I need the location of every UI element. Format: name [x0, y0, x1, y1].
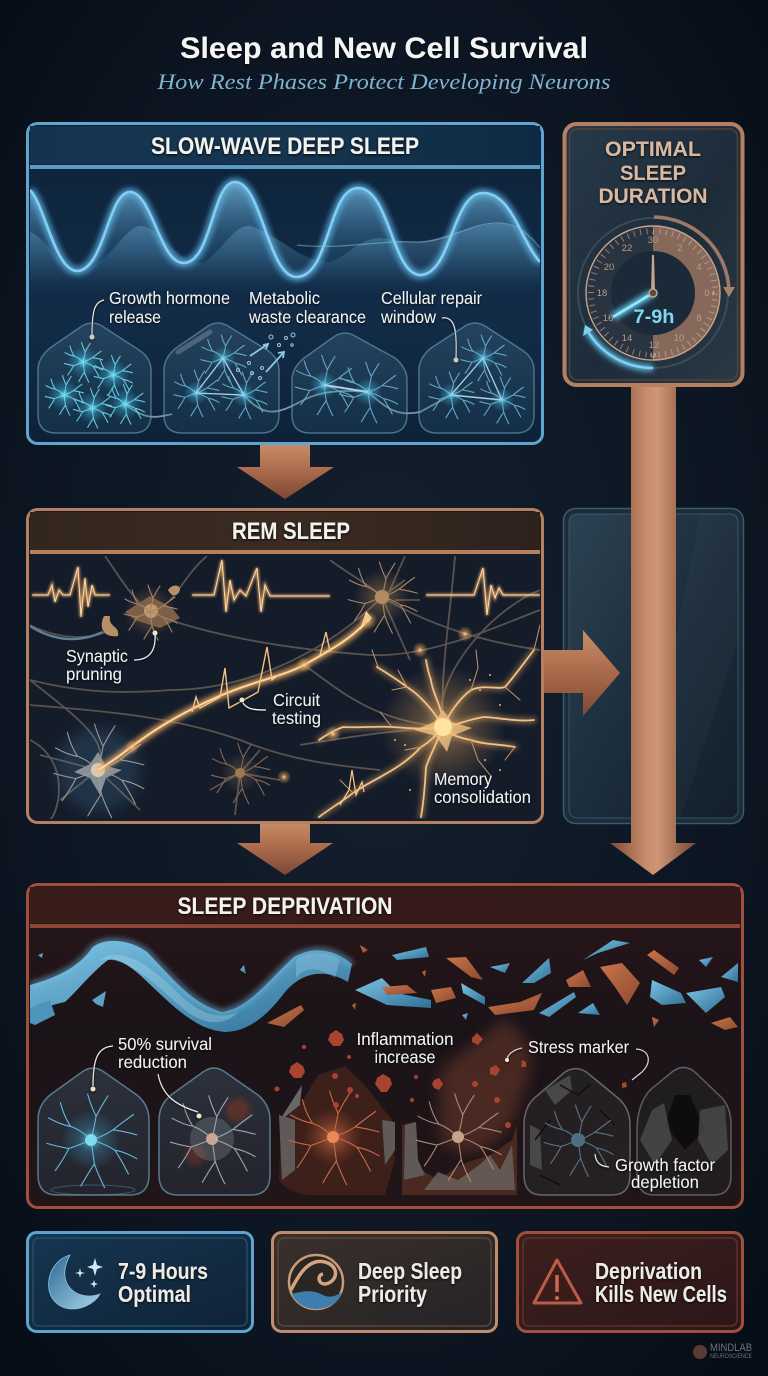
label: stress marker: Stress marker [528, 1037, 629, 1057]
clock numerals: 10 [674, 333, 684, 344]
ECG trace 1 [32, 567, 110, 617]
panel header: REM SLEEP [232, 518, 350, 545]
panel: slow-wave deep sleep [28, 124, 542, 444]
dome: cellular repair [419, 323, 534, 433]
arrow: deep sleep to REM [237, 444, 334, 499]
clock numerals: 30 [648, 235, 658, 246]
label: circuit testing: testing [272, 708, 321, 728]
clock dial [578, 217, 735, 368]
clock numerals: 0 [704, 288, 710, 299]
ECG trace 2 [192, 560, 330, 612]
label: growth hormone: release [109, 307, 161, 327]
card: deprivation kills new cells: Deprivation [595, 1258, 702, 1284]
label: growth hormone [90, 288, 230, 340]
neural network illustration [30, 556, 540, 820]
copper shards [267, 945, 738, 1030]
icon: waste particles and arrows [236, 333, 295, 380]
dome: dense neurons [38, 323, 151, 433]
panel header [30, 126, 540, 169]
label: growth factor depletion: depletion [631, 1172, 699, 1192]
watermark: Mindlab Neuroscience: MINDLAB [710, 1342, 752, 1354]
card: deprivation kills new cells: Kills New Cells [595, 1281, 727, 1307]
clock numerals: 16 [603, 313, 613, 324]
label: cellular repair window [380, 288, 482, 362]
clock numerals: 8 [696, 313, 702, 324]
clock numerals: 22 [622, 243, 632, 254]
panel header: SLEEP DEPRIVATION [178, 893, 392, 920]
dome: empty shattered [637, 1067, 731, 1195]
heading: optimal sleep duration [598, 138, 708, 208]
neuron: small copper [211, 743, 270, 804]
label: inflammation increase [356, 1029, 454, 1067]
label: stress marker [505, 1037, 648, 1080]
dome: damaged neuron [159, 1068, 270, 1195]
card: deep sleep priority [272, 1232, 496, 1332]
card: deep sleep priority: Deep Sleep [358, 1258, 462, 1284]
panel: REM sleep [28, 510, 542, 822]
neuron: memory consolidation [319, 625, 540, 817]
dome: healthy neuron [38, 1068, 149, 1195]
dome: linked neurons [292, 333, 407, 433]
icon: ocean wave [289, 1255, 343, 1309]
label: inflammation increase: Inflammation [356, 1029, 454, 1049]
broken wave fragments [30, 940, 738, 1032]
heading: optimal sleep duration: OPTIMAL [605, 138, 701, 161]
label: 50% survival reduction [90, 1034, 212, 1118]
panel header: SLOW-WAVE DEEP SLEEP [151, 133, 419, 160]
heading: optimal sleep duration: SLEEP [620, 162, 686, 185]
dome: smoking neuron [402, 1094, 517, 1195]
neuron: pruned synapse [30, 585, 180, 640]
title: Sleep and New Cell Survival [180, 32, 588, 65]
panel: sleep deprivation [28, 884, 742, 1208]
label: memory consolidation [434, 769, 531, 807]
clock numerals: 2 [677, 243, 683, 254]
glowing signal path [98, 610, 473, 805]
icon: moon and stars [49, 1255, 103, 1309]
neuron: top copper [348, 562, 417, 633]
label: memory consolidation: consolidation [434, 787, 531, 807]
panel: optimal sleep duration [564, 124, 742, 385]
arrow: REM to side panel [543, 630, 620, 716]
label: synaptic pruning: pruning [66, 664, 122, 684]
blue duration arc [587, 330, 653, 368]
clock numerals: 12 [649, 340, 659, 351]
label: memory consolidation: Memory [434, 769, 492, 789]
neuron: pale origin [54, 724, 144, 818]
dome: inflamed neuron [279, 1066, 395, 1195]
label: 50% survival reduction: reduction [118, 1052, 187, 1072]
ECG trace 3 [426, 568, 540, 615]
label: metabolic waste clearance: Metabolic [249, 288, 320, 308]
copper duration arc [654, 217, 729, 290]
panel header [30, 887, 740, 928]
subtitle: How Rest Phases Protect Developing Neurons [156, 69, 610, 94]
arrow: long copper duration arrow [610, 384, 696, 875]
clock numerals: 4 [696, 262, 702, 273]
dome: waste clearance [164, 323, 279, 433]
label: metabolic waste clearance: waste clearance [248, 307, 366, 327]
clock numerals: 18 [597, 288, 607, 299]
label: growth factor depletion: Growth factor [615, 1155, 715, 1175]
panel: glass side panel [564, 508, 744, 824]
label: growth factor depletion [595, 1154, 715, 1192]
label: synaptic pruning [66, 630, 158, 684]
card: 7-9 hours optimal: 7-9 Hours [118, 1258, 208, 1284]
watermark: Mindlab Neuroscience: NEUROSCIENCE [710, 1354, 752, 1360]
clock numerals: 14 [622, 333, 632, 344]
panel header [30, 512, 540, 554]
label: cellular repair window: window [380, 307, 436, 327]
smoke [439, 1020, 530, 1152]
watermark: Mindlab Neuroscience [693, 1342, 752, 1360]
label: cellular repair window: Cellular repair [381, 288, 482, 308]
label: growth hormone: Growth hormone [109, 288, 230, 308]
dome: shattered dark neuron [524, 1069, 630, 1195]
label: circuit testing [240, 690, 321, 728]
connecting axon [125, 391, 502, 417]
clock numerals: 20 [604, 262, 614, 273]
duration label: 7-9h [634, 307, 674, 328]
card: 7-9 hours optimal: Optimal [118, 1281, 191, 1307]
chart: slow brain waves [30, 182, 540, 300]
label: 50% survival reduction: 50% survival [118, 1034, 212, 1054]
card: deprivation kills new cells [518, 1232, 742, 1332]
card: 7-9 hours optimal [28, 1232, 252, 1332]
label: synaptic pruning: Synaptic [66, 646, 128, 666]
heading: optimal sleep duration: DURATION [598, 185, 708, 208]
inflammation particles [274, 1030, 627, 1128]
clock hands [613, 293, 653, 317]
label: inflammation increase: increase [374, 1047, 436, 1067]
arrow: REM to deprivation [237, 822, 333, 875]
card: deep sleep priority: Priority [358, 1281, 427, 1307]
icon: warning triangle [534, 1260, 581, 1303]
blue shards [240, 940, 738, 1020]
clock numerals [597, 235, 710, 351]
label: circuit testing: Circuit [273, 690, 320, 710]
label: metabolic waste clearance [248, 288, 366, 327]
